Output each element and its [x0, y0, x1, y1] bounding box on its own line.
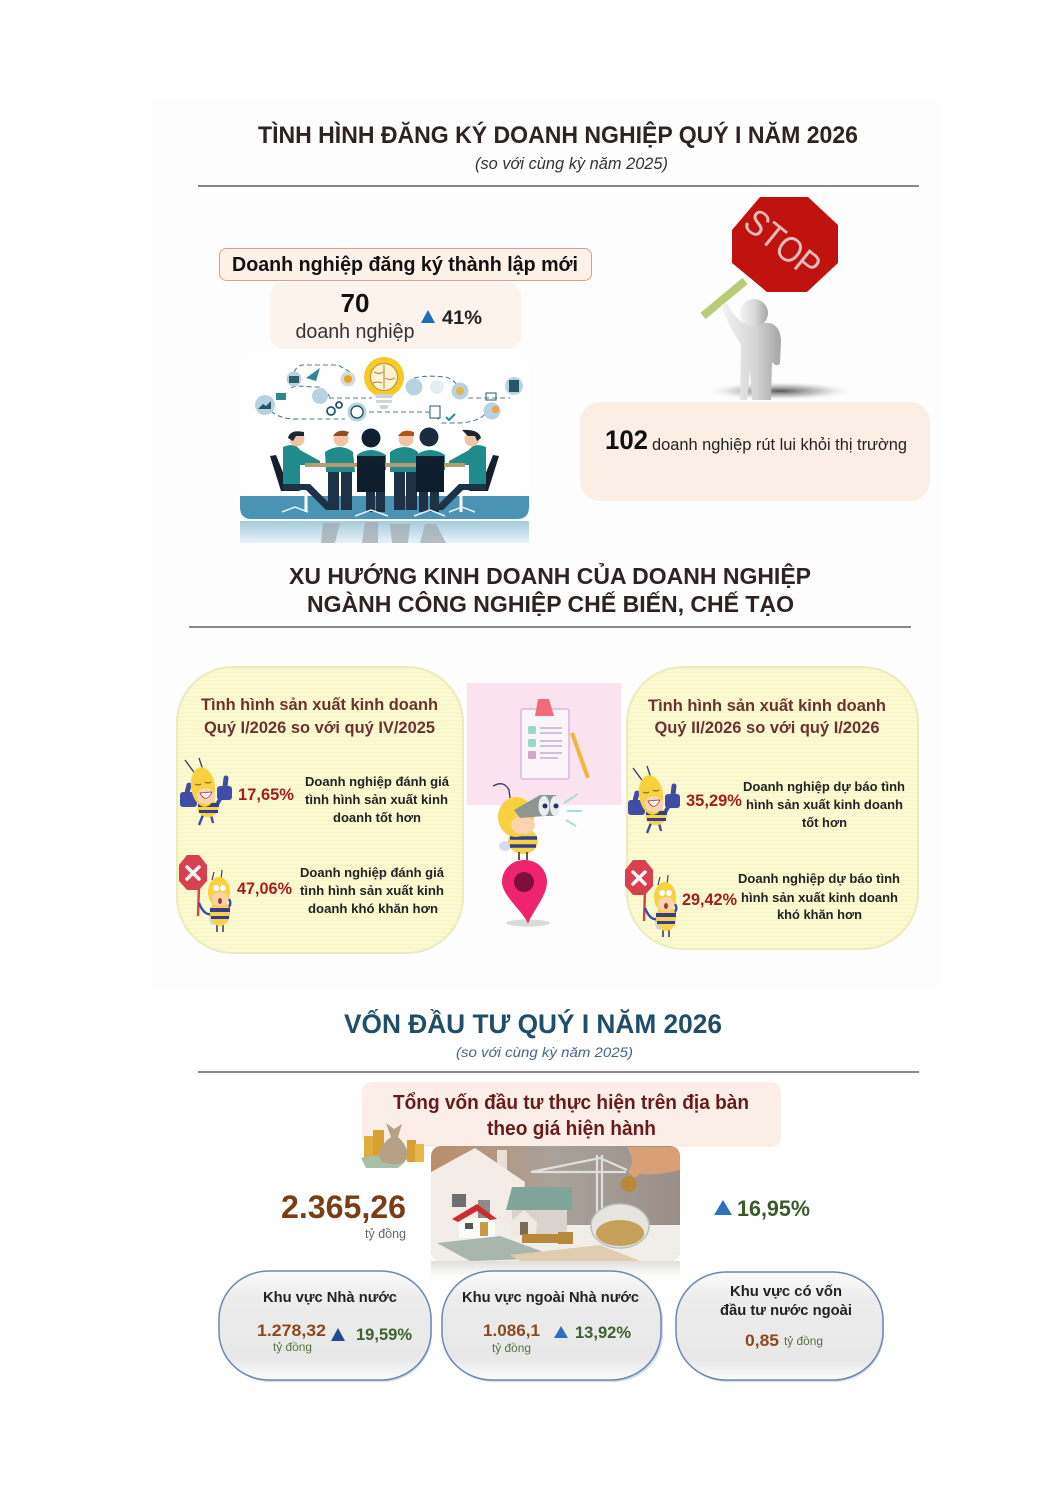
stat: harder 29,42%: 29,42%: [682, 890, 737, 909]
stat: harder 29,42%: hình sản xuất kinh doanh: [741, 890, 898, 905]
card: non-state sector: [442, 1271, 663, 1382]
panel heading: [648, 696, 886, 737]
stat: harder 47,06%: tình hình sản xuất kinh: [300, 883, 444, 898]
title: business registration: TÌNH HÌNH ĐĂNG KÝ DOANH NGHIỆP QUÝ I NĂM 2026: [258, 121, 858, 149]
heading: manufacturing business trends: NGÀNH CÔNG NGHIỆP CHẾ BIẾN, CHẾ TẠO: [307, 590, 794, 617]
card: non-state sector: tỷ đồng: [492, 1341, 531, 1355]
stat: total capital 2.365,26: 2.365,26: [281, 1189, 406, 1225]
card: foreign invested sector: 0,85: [745, 1332, 779, 1350]
icon: worried bee with stop sign: [179, 855, 230, 932]
panel: Q1/2026 vs Q4/2025: [177, 667, 463, 953]
stat: harder 47,06%: [237, 865, 445, 916]
stat: better 35,29%: [686, 779, 905, 830]
card: foreign invested sector: đầu tư nước ngoài: [720, 1303, 852, 1319]
stat: harder 29,42%: [682, 871, 900, 922]
icon: person holding stop sign: STOP: [736, 200, 829, 286]
stat: harder 47,06%: 47,06%: [237, 879, 292, 898]
icon: worried bee with stop sign: [625, 860, 676, 937]
heading box: total investment: Tổng vốn đầu tư thực hiện trên địa bàn: [393, 1092, 749, 1114]
illustration: checklist and bee on map pin: [467, 683, 621, 926]
stat card: 70 enterprises up 41%: [270, 282, 521, 349]
stat: better 35,29%: 35,29%: [686, 791, 742, 810]
panel: Q2/2026 vs Q1/2026: [625, 667, 918, 949]
panel: stop sign and market exits: [580, 197, 930, 501]
stat: harder 47,06%: doanh khó khăn hơn: [308, 901, 438, 916]
panel heading: [201, 695, 438, 737]
stat: total capital 2.365,26: tỷ đồng: [365, 1226, 406, 1241]
stat: better 35,29%: Doanh nghiệp dự báo tình: [743, 779, 905, 794]
card: state sector: 1.278,32: [257, 1322, 326, 1340]
card: foreign invested sector: Khu vực có vốn: [730, 1284, 842, 1300]
stat card: 70 enterprises up 41%: 70: [340, 288, 370, 318]
heading box: total investment: theo giá hiện hành: [487, 1118, 656, 1140]
card: state sector: Khu vực Nhà nước: [263, 1290, 397, 1306]
heading box: total investment: [362, 1082, 781, 1147]
title: investment capital: VỐN ĐẦU TƯ QUÝ I NĂM 2026: [344, 1007, 722, 1039]
stat card: 102 exits: 102: [605, 425, 648, 455]
panel heading: Tình hình sản xuất kinh doanh: [648, 696, 886, 715]
icon: light bulb with brain: [364, 357, 404, 409]
card: foreign invested sector: [676, 1272, 884, 1382]
stat: harder 47,06%: Doanh nghiệp đánh giá: [300, 865, 445, 880]
card: non-state sector: 13,92%: [575, 1324, 631, 1342]
heading box: newly registered enterprises: Doanh nghiệp đăng ký thành lập mới: [232, 254, 578, 276]
heading box: newly registered enterprises: [220, 248, 592, 280]
stat: better 35,29%: tốt hơn: [802, 815, 847, 830]
stat: better 17,65%: Doanh nghiệp đánh giá: [305, 774, 450, 789]
stat: better 35,29%: hình sản xuất kinh doanh: [746, 797, 903, 812]
panel heading: Quý I/2026 so với quý IV/2025: [204, 718, 435, 737]
stat: better 17,65%: [238, 774, 450, 825]
stat: harder 29,42%: Doanh nghiệp dự báo tình: [738, 871, 900, 886]
illustration: business meeting: [240, 357, 529, 543]
subtitle: comparison period: (so với cùng kỳ năm 2025): [475, 155, 668, 173]
floor band and reflection: [240, 496, 529, 543]
heading: manufacturing business trends: XU HƯỚNG KINH DOANH CỦA DOANH NGHIỆP: [289, 561, 811, 589]
people around table: [270, 428, 499, 516]
stat: total growth 16,95%: 16,95%: [737, 1196, 810, 1221]
card: non-state sector: 1.086,1: [483, 1322, 540, 1340]
card: non-state sector: Khu vực ngoài Nhà nước: [462, 1290, 639, 1306]
upper panel background: [152, 100, 940, 988]
icon: happy bee with thumbs up: [180, 758, 232, 825]
stat: total capital 2.365,26: [281, 1189, 406, 1241]
icon: money bag and coins: [361, 1123, 424, 1168]
photo: houses, crane and coins: [431, 1146, 680, 1287]
heading: manufacturing business trends: [289, 561, 811, 617]
card: foreign invested sector: tỷ đồng: [784, 1334, 823, 1348]
subtitle: investment comparison period: (so với cùng kỳ năm 2025): [456, 1044, 633, 1060]
panel heading: Quý II/2026 so với quý I/2026: [654, 718, 880, 737]
stat: better 17,65%: doanh tốt hơn: [333, 810, 421, 825]
card: state sector: [219, 1271, 432, 1382]
panel: new registrations: [220, 248, 592, 543]
stat card: 70 enterprises up 41%: 41%: [442, 308, 482, 329]
card: state sector: tỷ đồng: [273, 1340, 312, 1354]
stat: better 17,65%: tình hình sản xuất kinh: [305, 792, 448, 807]
icon: person holding stop sign: [703, 197, 852, 400]
card: state sector: 19,59%: [356, 1326, 412, 1344]
stat card: 102 exits: doanh nghiệp rút lui khỏi thị trường: [652, 435, 907, 454]
stat: better 17,65%: 17,65%: [238, 785, 294, 804]
panel heading: Tình hình sản xuất kinh doanh: [201, 695, 438, 714]
stat card: 102 exits: [580, 402, 930, 501]
icon: happy bee with thumbs up: [628, 766, 680, 833]
stat: harder 29,42%: khó khăn hơn: [777, 907, 862, 922]
stat card: 70 enterprises up 41%: doanh nghiệp: [296, 321, 414, 343]
